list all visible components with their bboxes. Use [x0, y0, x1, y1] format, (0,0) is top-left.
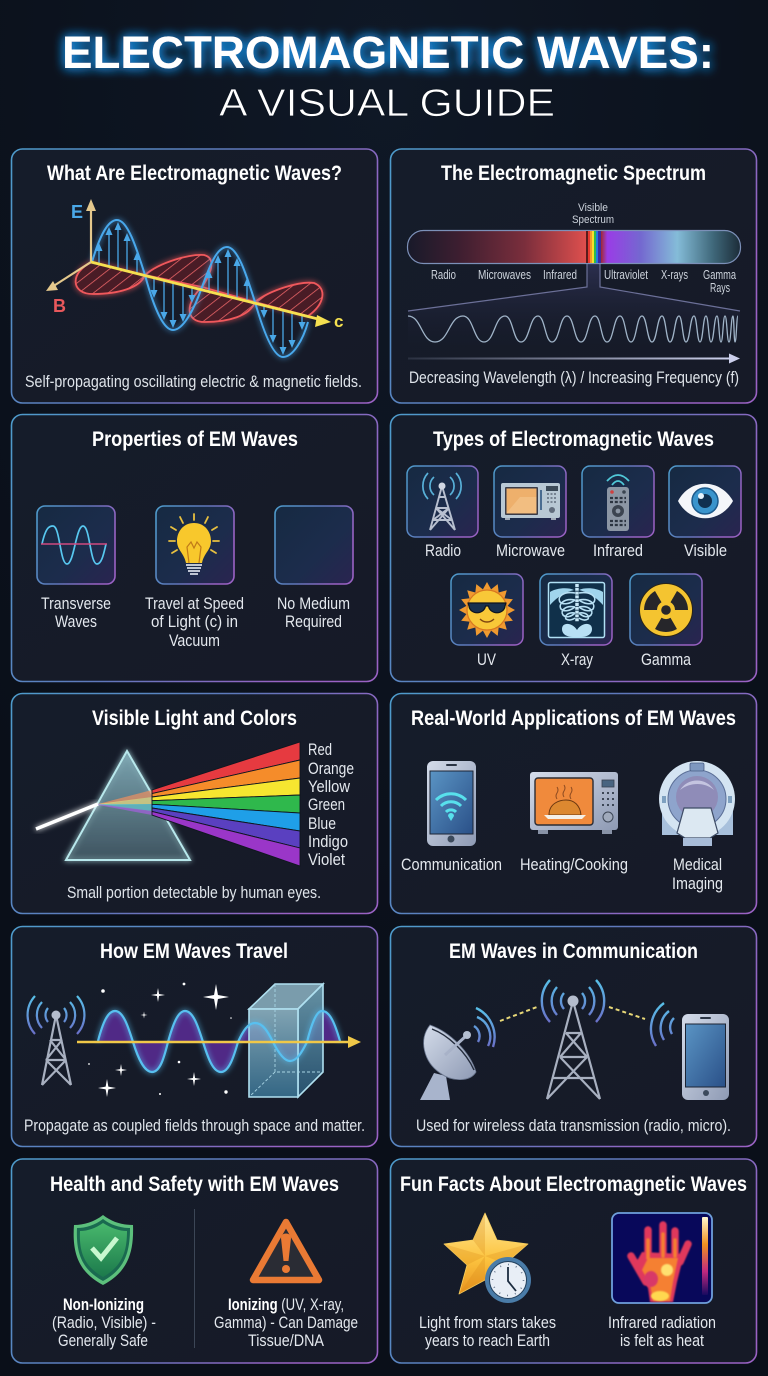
text: ionizing: Gamma) - Can Damage — [214, 1313, 358, 1332]
heading: what are EM waves: What Are Electromagnetic Waves? — [47, 161, 342, 185]
label: speed of light: Travel at Speed — [145, 594, 244, 613]
label: transverse: Transverse — [41, 594, 111, 613]
label: no medium — [277, 594, 350, 631]
icon: microwave with food — [530, 772, 618, 834]
spectrum labels: Rays — [710, 281, 730, 295]
color labels: Indigo — [308, 832, 348, 851]
caption: Small portion detectable by human eyes. — [67, 883, 321, 902]
icon: radiation — [630, 574, 702, 645]
icon: transverse wave — [37, 506, 115, 584]
diagram: EM wave axes and fields: c — [334, 312, 343, 331]
panel: what are EM waves — [12, 149, 378, 403]
heading: types: Types of Electromagnetic Waves — [433, 427, 714, 451]
icon: satellite dish — [420, 1008, 495, 1100]
spectrum bar — [408, 230, 740, 264]
color labels: Red — [308, 740, 332, 759]
label: speed of light — [145, 594, 244, 650]
heading: communication: EM Waves in Communication — [449, 939, 698, 963]
signal: dashed links — [500, 1007, 645, 1021]
icon: smartphone — [427, 761, 476, 846]
color labels — [308, 740, 354, 869]
icon: green shield — [74, 1215, 133, 1285]
caption: Self-propagating oscillating electric & magnetic fields. — [25, 372, 362, 391]
panel: health and safety — [12, 1159, 378, 1363]
label: medical imaging: Medical — [673, 855, 722, 874]
color labels: Blue — [308, 814, 336, 833]
label: medical imaging: Imaging — [672, 874, 723, 893]
text: ionizing: Tissue/DNA — [248, 1331, 325, 1350]
label: no medium: No Medium — [277, 594, 350, 613]
color labels: Orange — [308, 759, 354, 778]
spectrum labels: Gamma — [703, 268, 736, 282]
funnel outline — [408, 264, 740, 311]
icon: phone with signal — [651, 1003, 729, 1100]
label: visible spectrum — [572, 202, 614, 226]
label: medical imaging — [672, 855, 723, 893]
label: radio: Radio — [425, 541, 461, 560]
title: ELECTROMAGNETIC WAVES: — [62, 27, 714, 78]
label: communication: Communication — [401, 855, 502, 874]
text: ionizing: Ionizing (UV, X-ray, — [228, 1295, 344, 1314]
text: starlight: years to reach Earth — [425, 1331, 550, 1350]
text: non-ionizing: (Radio, Visible) - — [52, 1313, 156, 1332]
funnel zoom — [408, 264, 740, 345]
diagram: wave through space and matter — [28, 983, 361, 1097]
icon: light bulb — [156, 506, 234, 584]
panel: electromagnetic spectrum — [390, 149, 756, 403]
label: transverse — [41, 594, 111, 631]
label: infrared: Infrared — [593, 541, 643, 560]
label: no medium: Required — [285, 612, 342, 631]
text: non-ionizing: Generally Safe — [58, 1331, 148, 1350]
color labels: Yellow — [308, 777, 351, 796]
panel: communication — [390, 926, 756, 1146]
icon: x-ray — [540, 574, 612, 645]
icon: sun with sunglasses — [451, 574, 523, 645]
icon: cell tower — [542, 980, 604, 1099]
label: speed of light: of Light (c) in — [151, 612, 238, 631]
spectrum labels: Radio — [431, 268, 456, 282]
label: heating: Heating/Cooking — [520, 855, 628, 874]
icon: radio tower — [407, 466, 478, 537]
spectrum labels: Ultraviolet — [604, 268, 648, 282]
chirped wave — [408, 316, 738, 342]
panel: visible light — [12, 694, 378, 914]
icon: eye — [669, 466, 741, 537]
icon: MRI scanner — [659, 761, 735, 846]
label: transverse: Waves — [55, 612, 97, 631]
icon: microwave — [494, 466, 566, 537]
arrow: increasing frequency — [408, 354, 740, 364]
diagram: EM wave axes and fields: E — [71, 202, 83, 222]
title — [62, 27, 714, 125]
label: gamma: Gamma — [641, 650, 691, 669]
heading: health: Health and Safety with EM Waves — [50, 1172, 339, 1196]
icon: empty no-medium box — [275, 506, 353, 584]
label: microwave: Microwave — [496, 541, 565, 560]
heading: visible light: Visible Light and Colors — [92, 706, 297, 730]
spectrum labels: X-rays — [661, 268, 688, 282]
icon: star and clock — [444, 1213, 531, 1303]
text: starlight — [419, 1313, 556, 1350]
title: A VISUAL GUIDE — [219, 82, 555, 125]
text: non-ionizing — [52, 1295, 156, 1350]
label: visible spectrum: Visible — [578, 202, 608, 214]
text: starlight: Light from stars takes — [419, 1313, 556, 1332]
panel: applications — [390, 694, 756, 914]
spectrum labels: Infrared — [543, 268, 577, 282]
color labels: Green — [308, 795, 345, 814]
panel: how waves travel — [12, 926, 378, 1146]
diagram: prism and rainbow — [36, 742, 300, 866]
label: visible: Visible — [684, 541, 727, 560]
color labels: Violet — [308, 850, 345, 869]
icon: remote — [582, 466, 654, 537]
spectrum labels — [431, 268, 736, 295]
icon: warning triangle — [253, 1222, 319, 1280]
icon: thermal hand — [612, 1213, 712, 1303]
diagram: EM wave axes and fields: B — [53, 296, 66, 316]
spectrum labels: Microwaves — [478, 268, 531, 282]
caption: Propagate as coupled fields through space and matter. — [24, 1116, 365, 1135]
text: infrared: is felt as heat — [620, 1331, 704, 1350]
label: speed of light: Vacuum — [169, 631, 220, 650]
label: visible spectrum: Spectrum — [572, 214, 614, 226]
text: non-ionizing: Non-Ionizing — [63, 1295, 144, 1314]
panel: types — [390, 414, 756, 682]
text: infrared: Infrared radiation — [608, 1313, 716, 1332]
panel: fun facts — [390, 1159, 756, 1363]
text: ionizing — [214, 1295, 358, 1350]
heading: travel: How EM Waves Travel — [100, 939, 288, 963]
heading: properties: Properties of EM Waves — [92, 427, 298, 451]
label: UV: UV — [477, 650, 497, 669]
text: infrared — [608, 1313, 716, 1350]
panel: properties — [12, 414, 378, 682]
diagram: EM wave axes and fields — [46, 199, 343, 357]
heading: spectrum: The Electromagnetic Spectrum — [441, 161, 706, 185]
label: x-ray: X-ray — [561, 650, 593, 669]
